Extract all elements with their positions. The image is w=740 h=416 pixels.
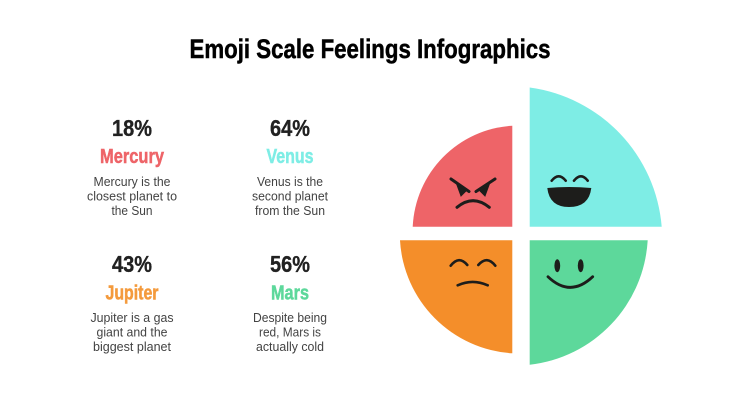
Mars percentage: 56% <box>270 251 310 277</box>
Mercury description: the Sun <box>112 203 152 218</box>
icon: angry face <box>451 179 495 207</box>
Venus description: second planet <box>252 188 328 204</box>
Mars description: red, Mars is <box>259 324 321 340</box>
icon: neutral face <box>451 260 495 285</box>
panel: Mercury <box>87 115 177 218</box>
Mars description: Despite being <box>253 310 327 325</box>
slice: cyan laughing <box>530 88 662 227</box>
panel: Jupiter <box>90 251 174 354</box>
Jupiter description <box>90 310 174 354</box>
panel: Venus <box>252 115 328 218</box>
Mercury description: Mercury is the <box>94 174 170 189</box>
chart: emoji scale pie <box>400 88 662 365</box>
Mercury description: closest planet to <box>87 188 177 204</box>
slice: red angry <box>413 126 512 227</box>
Jupiter description: biggest planet <box>93 339 171 354</box>
Jupiter percentage: 43% <box>112 251 152 277</box>
Mars description <box>253 310 327 354</box>
slice: orange neutral <box>400 240 512 353</box>
Mercury name: Mercury <box>100 146 165 168</box>
Jupiter description: giant and the <box>96 324 168 340</box>
Mars description: actually cold <box>256 339 324 354</box>
Jupiter description: Jupiter is a gas <box>90 310 174 325</box>
slice: green smile <box>530 240 648 365</box>
Venus percentage: 64% <box>270 115 310 141</box>
Venus name: Venus <box>266 146 314 168</box>
Mercury percentage: 18% <box>112 115 152 141</box>
panel: Mars <box>253 251 327 354</box>
Venus description: Venus is the <box>257 174 323 189</box>
icon: smiling face <box>548 259 593 287</box>
Venus description <box>252 174 328 218</box>
Mars name: Mars <box>271 282 309 304</box>
Mercury description <box>87 174 177 218</box>
Venus description: from the Sun <box>255 203 325 218</box>
title: Emoji Scale Feelings Infographics <box>190 34 550 64</box>
icon: laughing face <box>547 176 591 207</box>
Jupiter name: Jupiter <box>106 282 159 304</box>
